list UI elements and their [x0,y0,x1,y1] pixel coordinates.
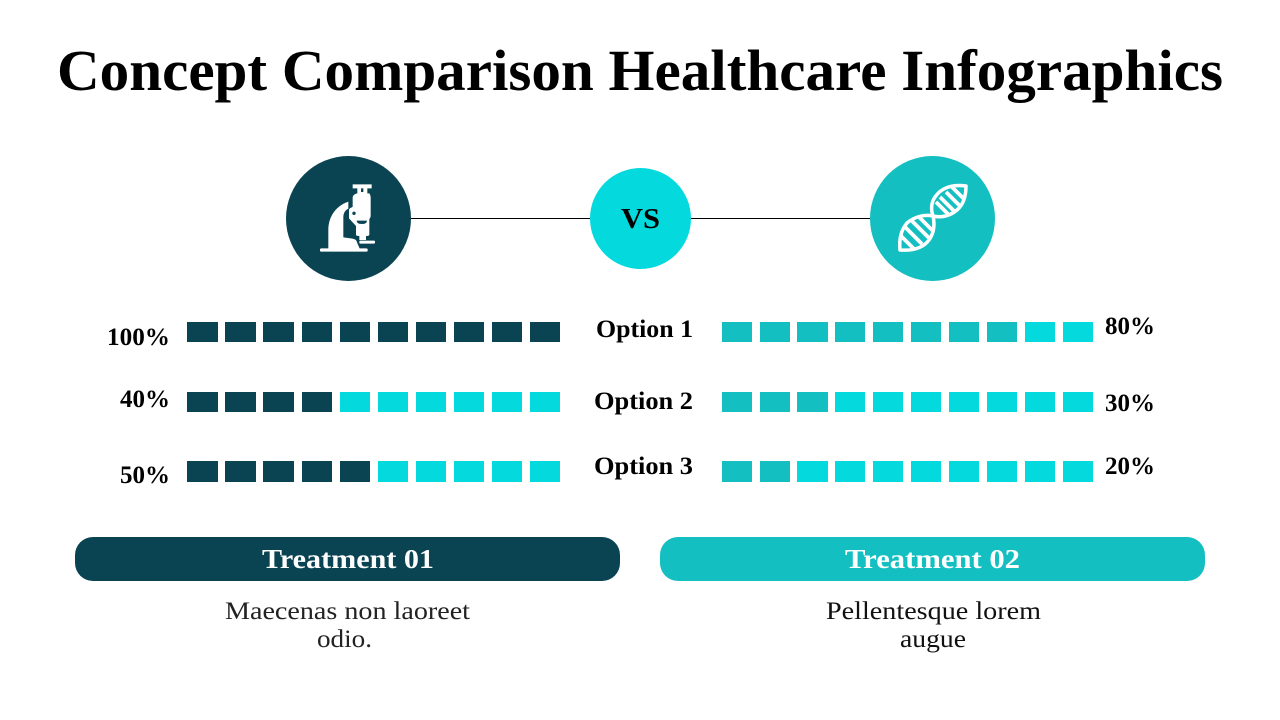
badge: VS [590,168,691,269]
left value: 100%: 100% [107,324,170,351]
description: treatment 02: augue [900,626,966,653]
banner: treatment 02 [660,537,1205,581]
right bars: option 2, 30% [722,392,1093,412]
description: treatment 02 [826,598,1042,653]
left bars: option 3, 50% [187,461,560,482]
banner: treatment 02: Treatment 02 [845,544,1020,574]
icon: microscope [286,156,411,281]
label: option 3: Option 3 [594,453,693,480]
left bars: option 2, 40% [187,392,560,412]
label: option 1: Option 1 [596,316,693,343]
right value: 80%: 80% [1105,313,1155,340]
banner: treatment 01 [75,537,620,581]
right bars: option 3, 20% [722,461,1093,482]
left value: 50%: 50% [120,462,170,489]
right bars: option 1, 80% [722,322,1093,342]
description: treatment 02: Pellentesque lorem [826,598,1042,625]
description: treatment 01: odio. [317,626,372,653]
badge: VS: VS [621,203,660,235]
banner: treatment 01: Treatment 01 [262,544,434,574]
description: treatment 01: Maecenas non laoreet [225,598,470,625]
description: treatment 01 [225,598,470,653]
left value: 40%: 40% [120,386,170,413]
icon: DNA helix [870,156,995,281]
connector line [411,218,870,220]
right value: 30%: 30% [1105,390,1155,417]
left bars: option 1, 100% [187,322,560,342]
right value: 20%: 20% [1105,453,1155,480]
title: Concept Comparison Healthcare Infographics [57,38,1223,103]
label: option 2: Option 2 [594,388,693,415]
